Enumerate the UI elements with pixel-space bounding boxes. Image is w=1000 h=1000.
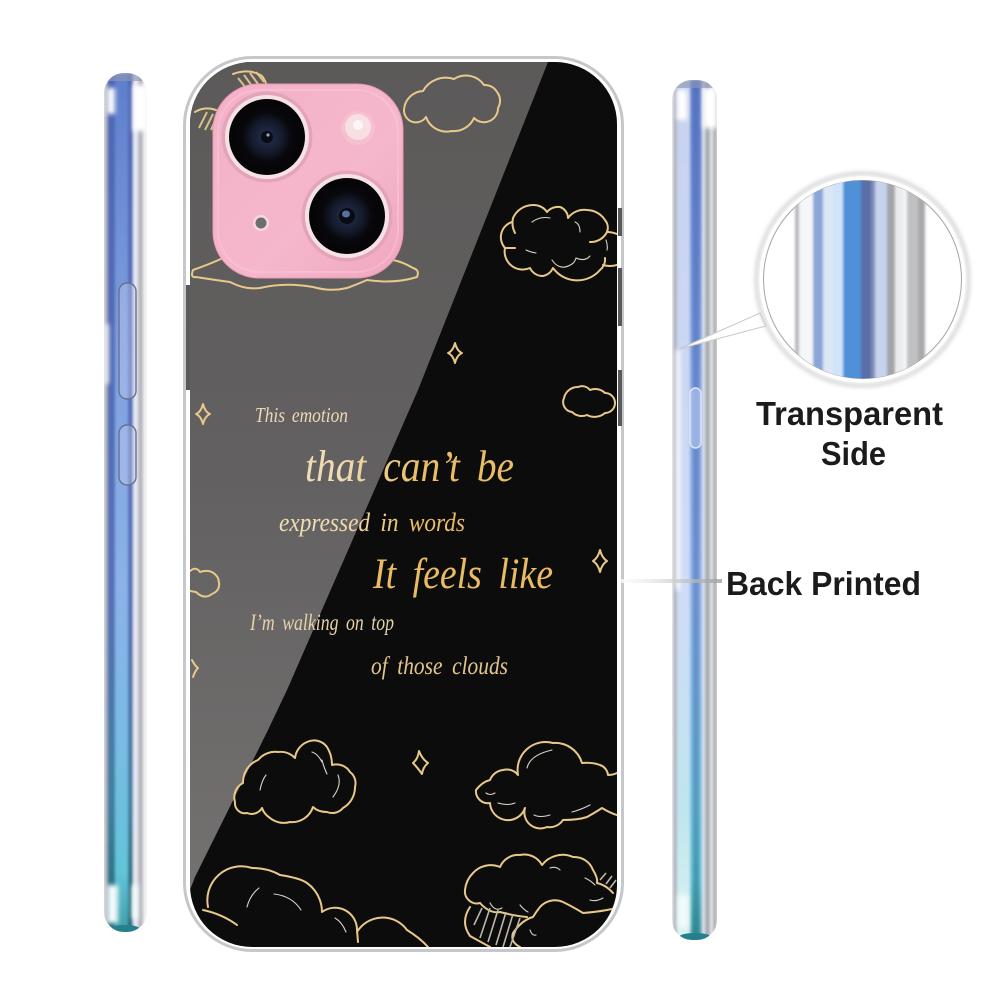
cloud: lower left	[234, 740, 356, 823]
camera island	[213, 84, 403, 278]
phone case back	[184, 58, 968, 950]
line: expressed in words: expressed in words	[279, 508, 465, 537]
cloud: bottom right	[465, 855, 613, 903]
right side view of phone case	[672, 80, 717, 941]
side buttons seen through case	[186, 208, 622, 426]
volume button outline	[119, 283, 136, 485]
star	[196, 404, 210, 424]
line: It feels like: It feels like	[372, 551, 553, 598]
label: Transparent Side: Side	[821, 435, 886, 472]
label: Back Printed: Back Printed	[726, 565, 921, 602]
line: I'm walking on top: I’m walking on top	[249, 610, 394, 635]
label: Transparent Side: Transparent	[756, 395, 943, 432]
line: This emotion: This emotion	[255, 403, 348, 427]
cloud: bottom left	[207, 866, 428, 947]
flash	[341, 111, 375, 145]
line: of those clouds: of those clouds	[371, 653, 508, 680]
cloud: lower right	[476, 742, 617, 828]
cloud: left small	[190, 569, 219, 597]
cloud: under camera	[192, 258, 418, 290]
quote text	[249, 403, 553, 680]
left side view of phone case	[104, 73, 147, 933]
cloud inner hatch and creases	[247, 218, 607, 935]
second lens	[302, 170, 392, 262]
star	[593, 550, 607, 572]
cloud: right upper	[512, 205, 608, 242]
power button outline	[690, 388, 701, 448]
main lens	[222, 92, 312, 182]
cloud: right small	[563, 386, 615, 417]
star	[413, 751, 428, 774]
magnifier callout: transparent side	[679, 170, 968, 390]
gold clouds and stars	[190, 71, 617, 947]
star	[192, 660, 198, 677]
diagonal glare	[190, 62, 548, 890]
star	[448, 343, 462, 363]
black printed back	[190, 62, 617, 947]
cloud: top centre	[404, 76, 500, 132]
label: Transparent Side	[756, 395, 943, 472]
magnifier ring	[756, 174, 968, 386]
pointer	[679, 313, 766, 349]
leader line: back printed	[620, 579, 722, 583]
magnified stripes	[795, 170, 925, 390]
microphone	[253, 215, 269, 231]
line: that can't be: that can’t be	[305, 442, 514, 491]
case rim	[184, 58, 622, 950]
